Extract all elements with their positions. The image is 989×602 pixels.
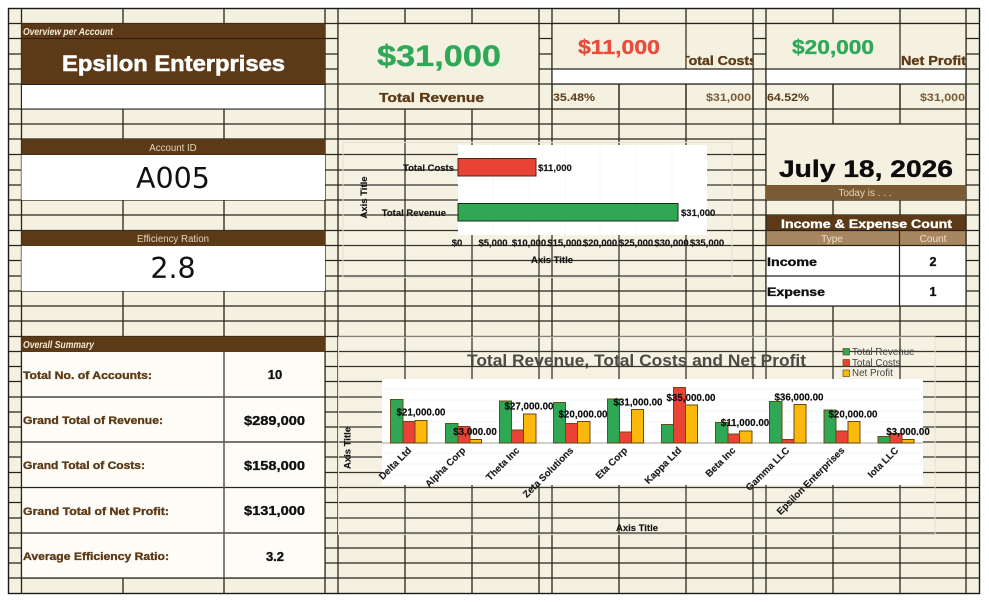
category and value labels: Total Costs [403,163,454,174]
data labels: $3,000.00 [886,427,930,438]
panel: today's date: July 18, 2026 [779,156,953,183]
value axis labels: $0 [452,238,462,249]
category labels: Alpha Corp [423,445,468,490]
data labels: $21,000.00 [396,408,446,418]
row: grand total revenue: Grand Total of Revenue: [23,415,163,427]
panel: efficiency ratio: 2.8 [150,252,196,285]
panel: today's date [766,124,966,200]
category labels: Theta Inc [484,445,523,483]
bars: epsilon enterprises [824,410,860,443]
panel: income and expense count: Count [920,234,947,245]
row: average efficiency ratio: 3.2 [266,549,284,564]
value axis labels [452,238,724,249]
data labels: $27,000.00 [504,402,554,412]
category labels: Iota LLC [866,445,901,481]
row: expense: 1 [930,285,937,299]
row: income: Income [767,257,817,269]
section banner: overall summary: Overall Summary [23,339,95,351]
category and value labels: Total Revenue [382,208,446,219]
data labels: $20,000.00 [828,410,878,420]
value axis labels: $15,000 [547,238,582,249]
kpi: net profit: $31,000 [920,92,965,104]
value axis labels: $30,000 [654,238,689,249]
chart title: Total Revenue, Total Costs and Net Profit [467,352,807,370]
category labels [377,445,901,517]
category and value labels: $11,000 [538,163,572,174]
kpi: net profit [766,24,967,109]
axis title: horizontal: Axis Title [616,523,658,534]
bars: zeta solutions [554,402,590,443]
data labels: $35,000.00 [666,393,716,404]
panel: income and expense count [766,215,966,306]
account name: Epsilon Enterprises [62,51,285,76]
panel: income and expense count: Type [821,234,843,245]
data labels: $20,000.00 [558,410,608,420]
bars: iota llc [878,434,914,443]
kpi: total revenue: Total Revenue [379,90,484,105]
axis title: vertical: Axis Title [359,176,370,219]
bars: alpha corp [446,424,482,443]
kpi: total costs: $11,000 [578,37,660,59]
data labels: $11,000.00 [721,418,770,429]
row: grand total net profit [23,503,305,518]
kpi: total costs: Total Costs [681,53,757,68]
category labels: Epsilon Enterprises [775,445,847,517]
row: grand total revenue [23,413,305,428]
value axis labels: $25,000 [619,238,653,249]
row: total accounts: Total No. of Accounts: [23,370,152,382]
kpi: total costs: $31,000 [706,92,751,104]
row: total accounts [23,367,282,382]
data labels: $36,000.00 [774,392,824,404]
bars: gamma llc [770,402,806,443]
category and value labels: $31,000 [681,208,715,219]
panel: overall summary [22,336,325,578]
kpi: total revenue: $31,000 [377,40,501,73]
panel: efficiency ratio [22,230,325,291]
data labels: $3,000.00 [453,427,497,438]
kpi: net profit: 64.52% [767,92,809,104]
row: grand total net profit: Grand Total of Net Profit: [23,506,169,518]
plot area [458,145,707,235]
category labels: Beta Inc [704,445,739,480]
bars: kappa ltd [662,388,698,443]
data labels: $31,000.00 [613,398,663,408]
row: expense: Expense [767,287,825,299]
row: income: 2 [930,255,937,269]
category labels: Delta Ltd [377,445,414,482]
row: grand total costs: $158,000 [244,458,305,473]
bars: delta ltd [390,400,427,443]
value axis labels: $20,000 [583,238,617,249]
kpi: net profit: $20,000 [792,37,874,59]
panel: income and expense count: Income & Expense Count [781,217,952,231]
plot area [382,379,923,485]
row: grand total costs: Grand Total of Costs: [23,460,145,472]
chart: total costs vs total revenue bar chart [343,142,732,278]
bars: theta inc [500,401,536,443]
section banner: overview per account: Overview per Account [23,26,113,38]
row: grand total net profit: $131,000 [244,503,305,518]
kpi: net profit: Net Profit [901,53,967,68]
row: average efficiency ratio [23,549,284,564]
panel: account id: Account ID [149,143,197,154]
category labels: Zeta Solutions [521,445,576,500]
row: total accounts: 10 [268,367,282,382]
row: grand total revenue: $289,000 [244,413,305,428]
axis title: vertical: Axis Title [342,427,354,469]
category labels: Gamma LLC [744,445,792,493]
section banner: overview per account [22,24,325,38]
row: average efficiency ratio: Average Efficiency Ratio: [23,551,169,563]
bar: total revenue [458,204,678,221]
bars: eta corp [608,399,644,443]
value axis labels: $5,000 [478,238,508,249]
panel: account id: A005 [136,162,210,195]
legend: Total Revenue [852,347,915,358]
row: expense [767,285,937,299]
row: grand total costs [23,458,305,473]
panel: account id [22,139,325,200]
legend: Net Profit [852,368,893,379]
row: income [767,255,937,269]
axis title: horizontal: Axis Title [531,255,573,266]
bars: beta inc [716,422,752,443]
category labels: Kappa Ltd [643,445,684,487]
legend: Total Costs [852,358,901,369]
kpi: total revenue [338,24,539,109]
account name [22,38,325,84]
panel: today's date: Today is . . . [838,188,892,199]
category and value labels [382,163,715,219]
category labels: Eta Corp [594,445,630,482]
value axis labels: $10,000 [512,238,546,249]
panel: account overview header [22,24,325,109]
chart: total revenue, total costs and net profit by account [338,337,935,534]
section banner: overall summary [22,336,325,352]
bar: total costs [458,158,536,176]
blank white row [22,84,325,109]
kpi: total costs: 35.48% [553,92,595,104]
legend [843,347,915,379]
value axis labels: $35,000 [690,238,724,249]
data labels [396,392,930,438]
kpi: total costs [552,24,757,109]
panel: efficiency ratio: Efficiency Ration [137,234,209,245]
